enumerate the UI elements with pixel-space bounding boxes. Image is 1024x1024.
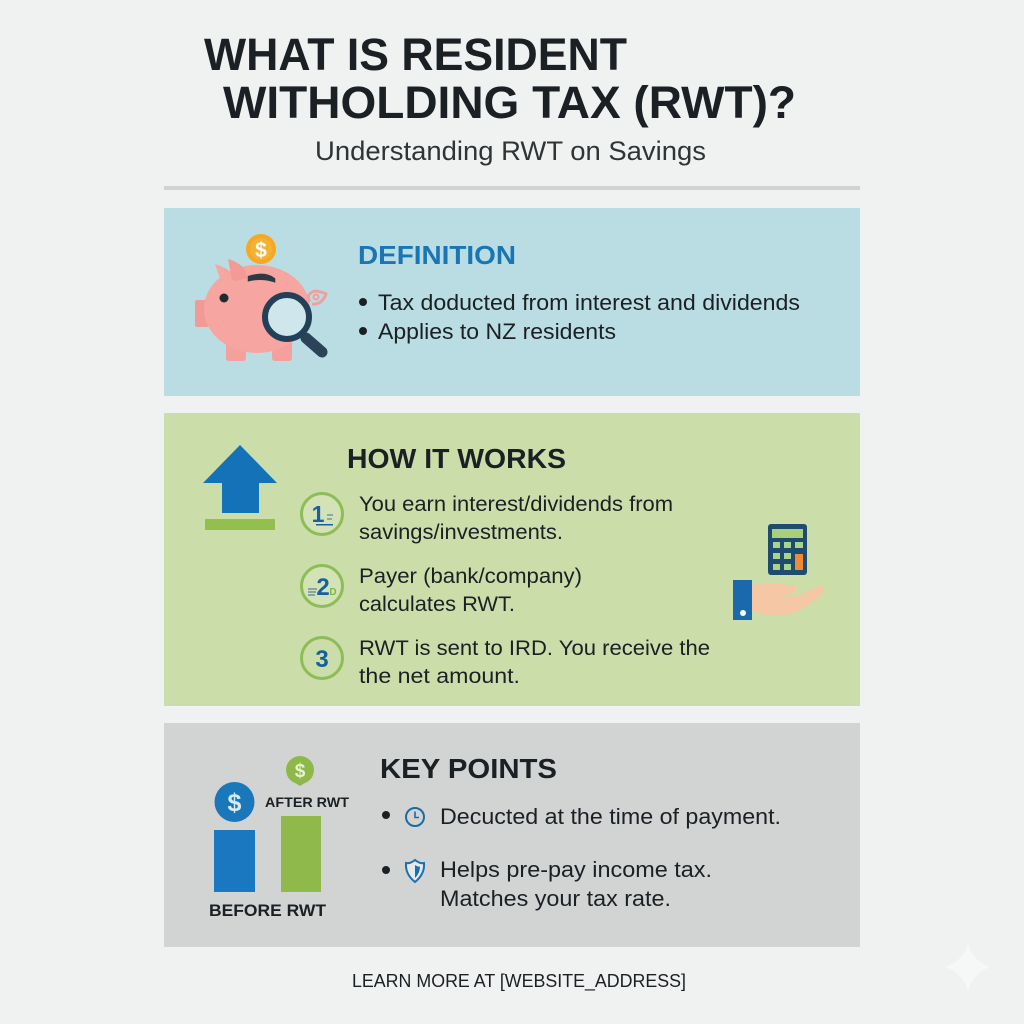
definition bullet 1: Tax doducted from interest and dividends <box>378 290 800 315</box>
definition bullet 2: Applies to NZ residents <box>378 319 616 344</box>
heading: definition: DEFINITION <box>358 240 516 270</box>
step 2 <box>302 565 582 616</box>
icon: blue dollar coin: $ <box>228 789 242 817</box>
bar: after RWT <box>281 816 321 892</box>
title: WHAT IS RESIDENT <box>204 29 627 80</box>
icon: sparkle watermark <box>945 944 990 991</box>
step 1: savings/investments. <box>359 521 563 544</box>
footer text: LEARN MORE AT [WEBSITE_ADDRESS] <box>352 971 686 992</box>
step 2: D <box>329 587 337 598</box>
heading: how it works: HOW IT WORKS <box>347 443 566 474</box>
label: before RWT: BEFORE RWT <box>209 901 327 920</box>
step 1 <box>302 493 673 544</box>
step 3 <box>302 637 710 688</box>
icon: green dollar pin <box>286 756 314 786</box>
key point 1: Decucted at the time of payment. <box>440 804 781 829</box>
icon: green dollar pin: $ <box>295 761 306 782</box>
key point 2: Matches your tax rate. <box>440 886 671 911</box>
step 3: 3 <box>315 646 329 673</box>
panel: definition <box>164 208 860 396</box>
panel: how it works <box>164 413 860 706</box>
key point 2: Helps pre-pay income tax. <box>440 857 712 882</box>
heading: key points: KEY POINTS <box>380 753 557 784</box>
icon: upload arrow <box>203 445 277 530</box>
step 3: RWT is sent to IRD. You receive the <box>359 637 710 660</box>
icon: hand holding calculator <box>733 524 824 620</box>
icon: piggy bank with magnifier: $ <box>255 239 267 262</box>
step 2: 2 <box>316 574 330 601</box>
step 1: You earn interest/dividends from <box>359 493 673 516</box>
icon: piggy bank with magnifier <box>195 234 326 361</box>
subtitle: Understanding RWT on Savings <box>315 136 706 166</box>
step 2: calculates RWT. <box>359 593 515 616</box>
bar: before RWT <box>214 830 255 892</box>
chart: before and after RWT bars <box>209 756 349 920</box>
step 2: Payer (bank/company) <box>359 565 582 588</box>
icon: blue dollar coin <box>214 782 254 822</box>
label: after RWT: AFTER RWT <box>265 794 349 810</box>
step 1: 1 <box>312 501 325 527</box>
panel: key points <box>164 723 860 947</box>
key point 2 <box>382 857 712 911</box>
title <box>204 29 796 128</box>
title: WITHOLDING TAX (RWT)? <box>223 77 796 128</box>
step 3: the net amount. <box>359 665 520 688</box>
